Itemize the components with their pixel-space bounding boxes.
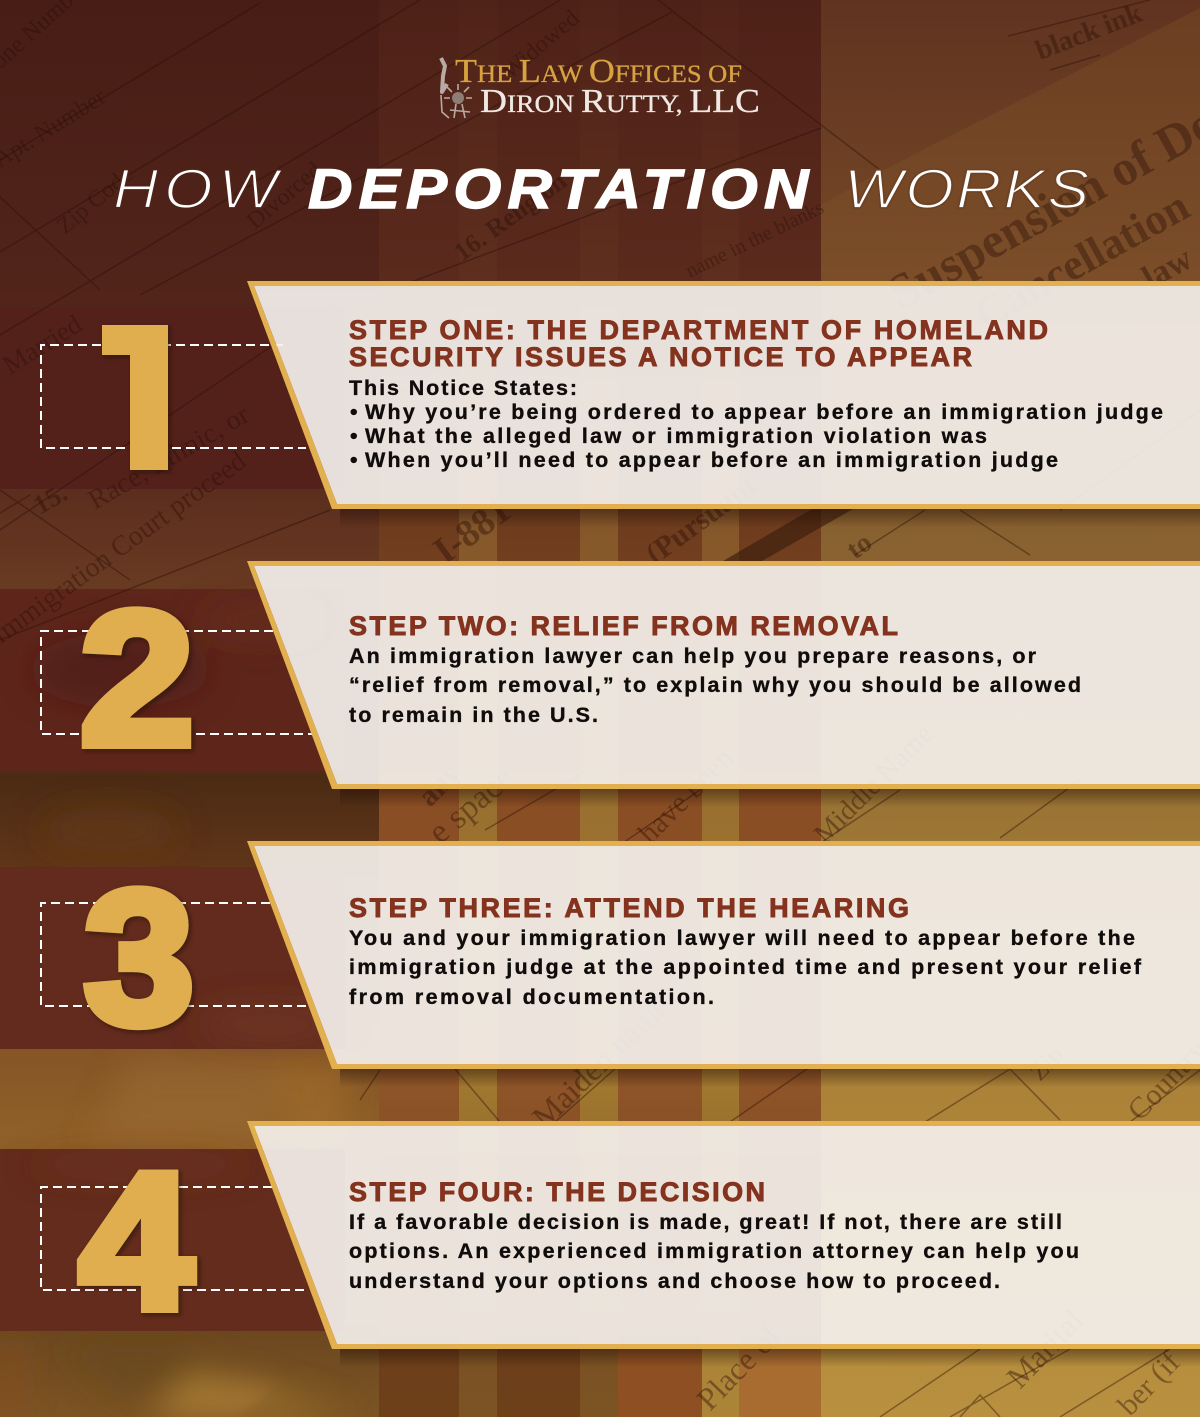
title — [113, 157, 1089, 220]
left colour bands — [0, 391, 332, 1331]
faint form text: law — [1136, 240, 1199, 297]
faint form text: Marital — [999, 1302, 1091, 1395]
step two text: to remain in the U.S. — [349, 703, 598, 727]
step two text: “relief from removal,” to explain why you should be allowed — [349, 673, 1081, 697]
logo text: Diron Rutty, LLC: DIRON RUTTY, LLC — [480, 83, 760, 120]
logo — [441, 53, 760, 120]
faint form text: 16. Religion — [448, 166, 572, 267]
title: WORKS — [844, 157, 1089, 220]
step one text: What the alleged law or immigration violation was — [365, 424, 987, 448]
step one heading — [349, 315, 1048, 372]
step four text: If a favorable decision is made, great! If not, there are still — [349, 1210, 1062, 1234]
step two heading: STEP TWO: RELIEF FROM REMOVAL — [349, 611, 898, 641]
step one text — [349, 376, 1163, 472]
step three text: You and your immigration lawyer will need to appear before the — [349, 926, 1135, 950]
faint form text: have been — [632, 741, 740, 850]
faint form text: Zip — [1023, 1040, 1069, 1086]
step 2 marker — [41, 561, 1200, 807]
step one heading: STEP ONE: THE DEPARTMENT OF HOMELAND — [349, 315, 1048, 345]
faint form text: Cancellation — [966, 181, 1197, 339]
faint form text: e space — [421, 759, 521, 851]
faint form text: (Pursuant — [640, 469, 763, 571]
faint form text: Zip Code — [52, 162, 138, 240]
panel: step two — [247, 561, 1200, 807]
title: DEPORTATION — [308, 159, 810, 220]
step one text: • — [350, 448, 358, 472]
faint form text: Widowed — [497, 5, 585, 85]
panel: step four — [247, 1121, 1200, 1367]
step three text: from removal documentation. — [349, 985, 714, 1009]
faint form text: to — [841, 527, 878, 566]
step 1 marker — [41, 281, 1200, 527]
step 4 marker — [41, 1121, 1200, 1367]
faint form text: Maiden name — [525, 988, 676, 1135]
faint form text: any — [412, 757, 468, 813]
dashed frame — [41, 903, 309, 1006]
step three text: immigration judge at the appointed time and present your relief — [349, 955, 1142, 979]
fold in top right sheet — [821, 8, 1200, 281]
step 3 marker — [41, 841, 1200, 1087]
dashed frame — [41, 1187, 306, 1290]
step four text: options. An experienced immigration attorney can help you — [349, 1239, 1079, 1263]
numeral 4: 4 — [79, 1133, 193, 1350]
panel: step three — [247, 841, 1200, 1087]
vertical stripes — [379, 0, 821, 1417]
step three heading: STEP THREE: ATTEND THE HEARING — [349, 893, 909, 923]
title: HOW — [113, 157, 283, 220]
step four text: understand your options and choose how to proceed. — [349, 1269, 1000, 1293]
faint form text: Divorced — [242, 157, 327, 235]
faint form text: 15. — [28, 477, 72, 520]
step one text: When you’ll need to appear before an immigration judge — [365, 448, 1058, 472]
step three text — [349, 926, 1142, 1009]
step two text: An immigration lawyer can help you prepare reasons, or — [349, 644, 1037, 668]
panel: step one — [247, 281, 1200, 527]
step one text: • — [350, 400, 358, 424]
numeral 1 — [100, 325, 174, 474]
numeral 3: 3 — [84, 852, 194, 1064]
faint form text: Race, Ethnic, or — [83, 399, 255, 516]
dashed frame — [41, 345, 306, 448]
step one text: This Notice States: — [349, 376, 577, 400]
step one heading: SECURITY ISSUES A NOTICE TO APPEAR — [349, 342, 972, 372]
step one text: Why you’re being ordered to appear before an immigration judge — [365, 400, 1163, 424]
step one text: • — [350, 424, 358, 448]
logo text: The Law Offices of: THE LAW OFFICES OF — [455, 53, 742, 90]
step two text — [349, 644, 1081, 727]
faint form text: I-881 — [426, 489, 519, 572]
numeral 1: 1 — [105, 295, 169, 507]
step four text — [349, 1210, 1079, 1293]
faint form text: name in the blanks — [683, 197, 828, 282]
faint form text: Middle Name — [808, 719, 939, 850]
step four heading: STEP FOUR: THE DECISION — [349, 1177, 765, 1207]
icon: statue of liberty — [441, 58, 472, 118]
faint form text: Place of — [689, 1317, 787, 1417]
dashed frame — [41, 631, 312, 734]
numeral 2: 2 — [80, 573, 194, 785]
